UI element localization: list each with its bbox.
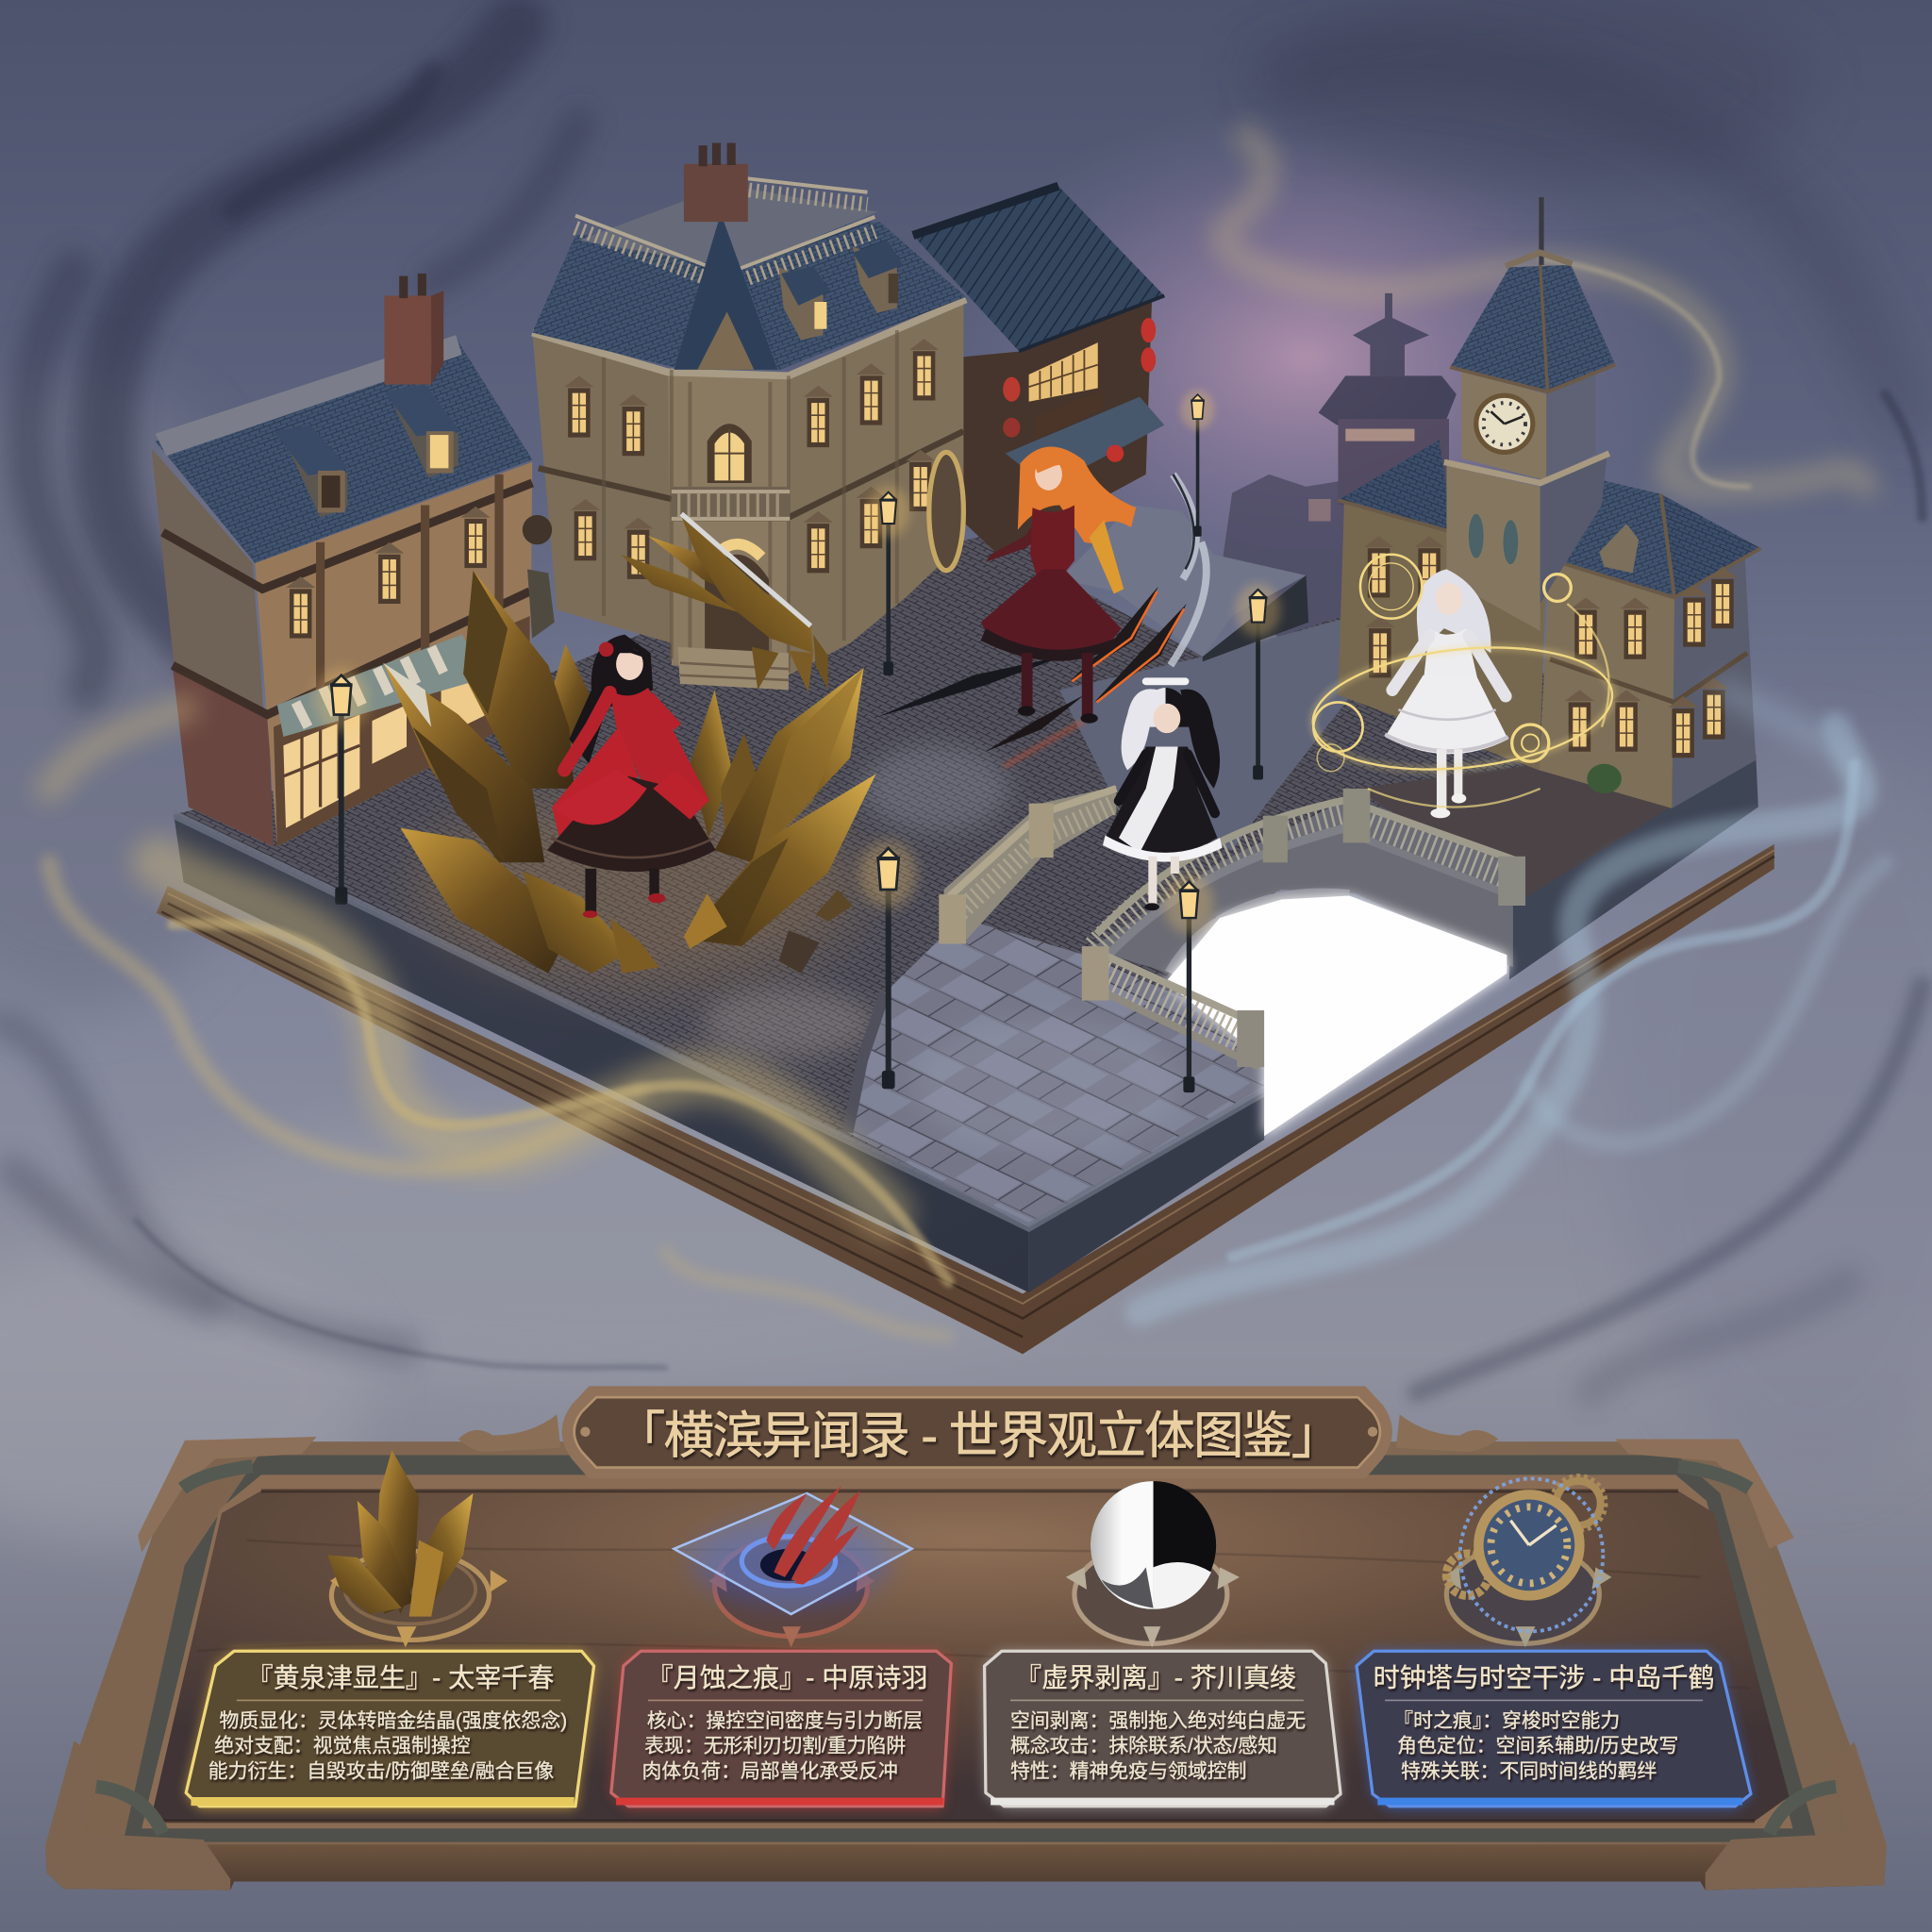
twin tails (1122, 689, 1158, 770)
gold smoke front (49, 708, 949, 1337)
smoke behind: gold wisps upper right (1223, 136, 1867, 488)
central arched window (708, 424, 752, 483)
wood plinth (157, 844, 1774, 1354)
golden crystal cluster (383, 514, 876, 974)
character: dark-haired girl in red dress (547, 635, 716, 918)
icon: red claw slashes on blue rift (674, 1486, 912, 1647)
card: gold: 物质显化：灵体转暗金结晶(强度依怨念) (219, 1710, 567, 1732)
icon: gold crystal (327, 1450, 508, 1647)
card: red: 肉体负荷：局部兽化承受反冲 (641, 1761, 898, 1783)
ink swirls (0, 25, 1923, 1392)
card: silver: 概念攻击：抹除联系/状态/感知 (1010, 1735, 1277, 1757)
mansion windows (564, 375, 594, 438)
icon: black and white orb (1066, 1481, 1240, 1647)
street lamps (314, 390, 1280, 1092)
distant pagoda and rooftops (1220, 293, 1457, 641)
clock face (1474, 393, 1535, 455)
mansion walls (532, 333, 672, 643)
card: blue: 『时之痕』：穿梭时空能力 (1393, 1710, 1620, 1732)
card: blue: 时钟塔与时空干涉 - 中岛千鹤 (1374, 1663, 1715, 1692)
card: blue: 特殊关联：不同时间线的羁绊 (1401, 1761, 1657, 1783)
house roof (156, 338, 532, 563)
card: gold: 『黄泉津显生』- 太宰千春 (246, 1663, 554, 1692)
mansion (532, 143, 966, 690)
card: gold: 能力衍生：自毁攻击/防御壁垒/融合巨像 (208, 1761, 554, 1783)
mansion dormers (778, 267, 823, 340)
character: orange-haired girl in crimson dress (981, 446, 1136, 724)
gate arch (929, 452, 963, 571)
blue smoke front (1140, 690, 1885, 1312)
card: blue (1357, 1651, 1751, 1808)
card: silver (985, 1651, 1341, 1808)
card: red: 核心：操控空间密度与引力断层 (647, 1710, 923, 1732)
hanging sign (523, 515, 552, 544)
corner brackets (45, 1437, 1887, 1890)
card: silver: 空间剥离：强制拖入绝对纯白虚无 (1010, 1710, 1306, 1732)
card: gold (186, 1651, 594, 1808)
info panel (45, 1386, 1887, 1890)
mansion chimney (684, 164, 748, 222)
tower shaft (1446, 466, 1541, 631)
clock building windows (1364, 536, 1393, 597)
entrance and steps (677, 544, 789, 690)
card: silver: 特性：精神免疫与领域控制 (1010, 1761, 1247, 1783)
bridge with stone balustrades (939, 786, 1525, 1067)
card: red: 『月蚀之痕』- 中原诗羽 (647, 1663, 928, 1692)
panel frame (45, 1441, 1887, 1890)
diorama base (157, 506, 1774, 1354)
icon: pocket watch with gears (1441, 1476, 1611, 1647)
cracked street and blades (877, 475, 1207, 766)
clock tower roofs (1338, 440, 1453, 532)
balcony (672, 487, 790, 521)
title text: 「横滨异闻录 - 世界观立体图鉴」 (615, 1408, 1341, 1464)
wood board (150, 1491, 1789, 1821)
glowing white canal (1091, 801, 1513, 1136)
floating crystal claw (621, 514, 828, 692)
card: blue: 角色定位：空间系辅助/历史改写 (1397, 1735, 1678, 1757)
title plaque (458, 1386, 1498, 1478)
house windows (286, 576, 315, 639)
card: gold: 绝对支配：视觉焦点强制操控 (214, 1735, 471, 1757)
mansion roof (532, 222, 966, 370)
left house (152, 274, 555, 846)
card: red (611, 1651, 951, 1808)
card: silver: 『虚界剥离』- 芥川真绫 (1015, 1663, 1296, 1692)
house dormers (274, 385, 459, 518)
stone walls (174, 814, 1029, 1292)
golden time rings (1307, 555, 1618, 808)
house chimney (385, 274, 443, 385)
paved surface (174, 530, 1756, 1227)
tower spire roof (1450, 265, 1615, 391)
clock tower building (1338, 197, 1760, 808)
character: white-haired girl with golden clock rings (1307, 555, 1618, 818)
raised broken road (1059, 506, 1306, 657)
shop window and awning (277, 635, 487, 828)
card: red: 表现：无形利刃切割/重力陷阱 (644, 1735, 906, 1757)
character: black and white maid girl (1103, 681, 1223, 910)
Japanese-style building (913, 186, 1164, 555)
